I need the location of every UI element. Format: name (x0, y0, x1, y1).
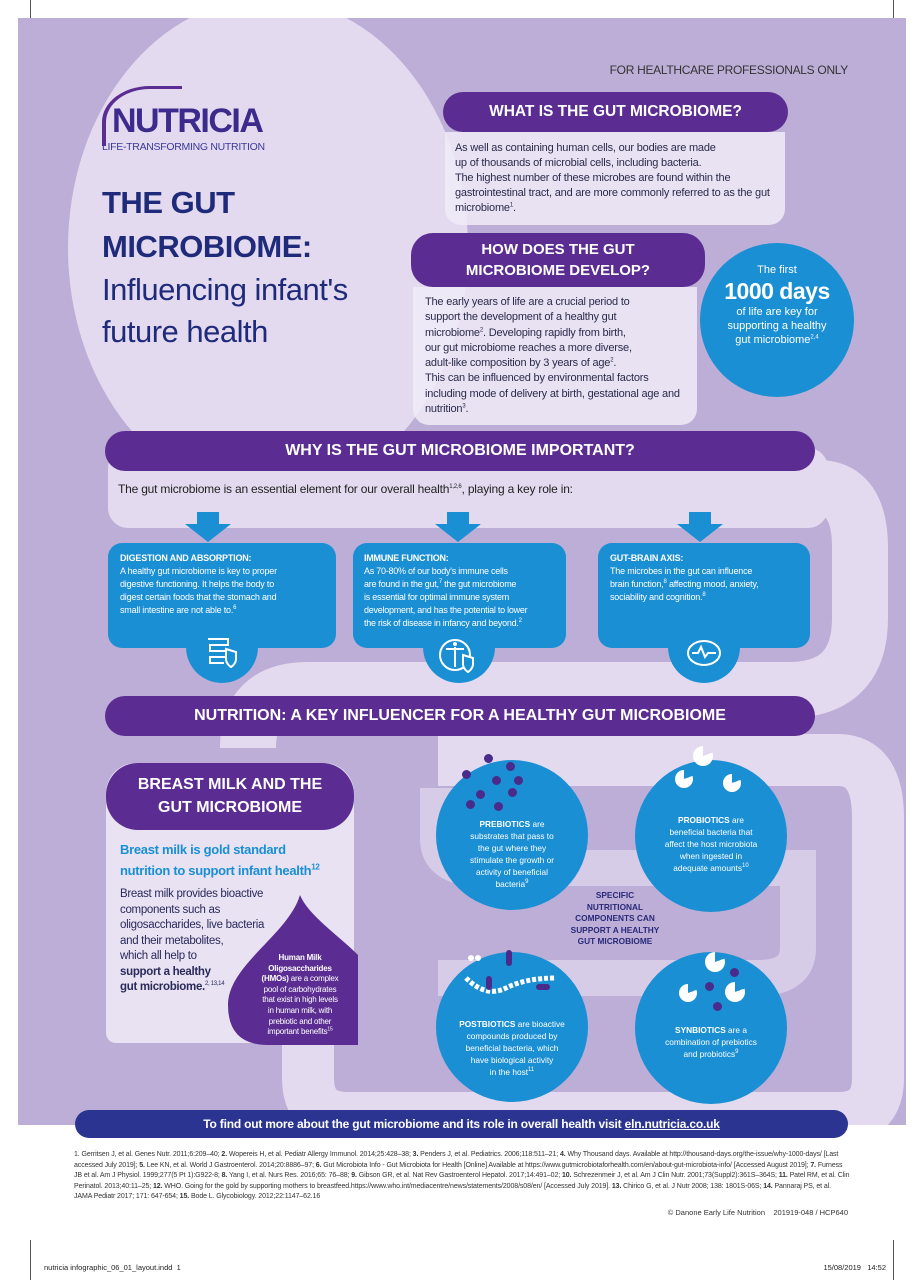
callout: HMO drop: important benefits15 (267, 1026, 333, 1036)
circle: prebiotics: the gut where they (478, 843, 546, 853)
circle: prebiotics: PREBIOTICS are (479, 819, 544, 829)
circle: probiotics (635, 760, 787, 912)
circle: prebiotics (436, 760, 588, 910)
heading: GUT MICROBIOME (158, 799, 302, 816)
panel: digestion (108, 543, 336, 683)
callout: HMO drop (228, 895, 358, 1045)
title: future health (102, 314, 268, 349)
text block: oligosaccharides, live bacteria (120, 919, 264, 931)
panel: digestion: small intestine are not able to.6 (120, 605, 236, 615)
circle: synbiotics (635, 952, 787, 1104)
panel: digestion: A healthy gut microbiome is key to proper (120, 566, 277, 576)
heading: MICROBIOME DEVELOP? (466, 262, 650, 279)
heading (411, 233, 705, 287)
text block: intro: The gut microbiome is an essential element for our overall health1,2,6, playing a key role in: (118, 482, 573, 496)
crop marks (30, 0, 31, 18)
circle: prebiotics: activity of beneficial (476, 867, 548, 877)
subheading: Breast milk is gold standard (120, 842, 286, 857)
callout: HMO drop: prebiotic and other (269, 1017, 331, 1026)
circle: synbiotics: and probiotics9 (683, 1049, 738, 1059)
callout: 1000 days: of life are key for (736, 306, 818, 318)
circle: postbiotics: have biological activity (471, 1055, 553, 1065)
callout: 1000 days: gut microbiome2,4 (735, 334, 819, 346)
text block: and their metabolites, (120, 934, 223, 946)
panel: digestion: DIGESTION AND ABSORPTION: (120, 553, 251, 563)
circle: synbiotics: combination of prebiotics (665, 1037, 757, 1047)
panel: immune: IMMUNE FUNCTION: (364, 553, 448, 563)
subheading: nutrition to support infant health12 (120, 863, 320, 878)
icon: intestine (208, 638, 237, 668)
callout: 1000 days: The first (757, 264, 797, 276)
text: 15/08/2019 14:52 (823, 1263, 886, 1272)
footer bar (75, 1110, 848, 1138)
callout: 1000 days: 1000 days (724, 278, 830, 304)
callout: HMO drop: that exist in high levels (262, 995, 338, 1004)
references: 1. Gerritsen J, et al. Genes Nutr. 2011;6:209–40; 2. Wopereis H, et al. Pediatr Allergy Immunol. 2014;25:428–38; 3. Penders J, et al. Pediatrics. 2006;118:511–21; 4. Why Thousand days. Available at http://thousand-days.org/the-issue/why-1000-days/ [Last accessed July 2019]; 5. Lee KN, et al. World J Gastroenterol. 2014;20:8886–97; 6. Gut Microbiota Info - Gut Microbiota for Health [Online] Available at https://www.gutmicrobiotaforhealth.com/en/about-gut-microbiota-info/ [Accessed August 2019]; 7. Furness JB et al. Am J Physiol. 1999;277(5 Pt 1):G922-8; 8. Yang I, et al. Nurs Res. 2016;65: 76–88; 9. Gibson GR, et al. Nat Rev Gastroenterol Hepatol. 2017;14:491–02; 10. Schrezenmeir J, et al. Am J Clin Nutr. 2001;73(Suppl2):361S–364S; 11. Patel RM, et al. Clin Perinatol. 2013;40:11–25; 12. WHO. Going for the gold by supporting mothers to breastfeed.https://www.who.int/mediacentre/news/statements/2008/s08/en/ [Accessed July 2019]. 13. Chirico G, et al. J Nutr 2008; 138: 1801S-06S; 14. Pannaraj PS, et al. JAMA Pediatr 2017; 171: 647-654; 15. Bode L. Glycobiology. 2012;22:1147–62.16 (74, 1151, 849, 1200)
disclaimer: FOR HEALTHCARE PROFESSIONALS ONLY (610, 63, 848, 77)
text block: centre: SPECIFIC NUTRITIONAL COMPONENTS CAN SUPPORT A HEALTHY GUT MICROBIOME (571, 890, 659, 946)
callout: HMO drop: Human Milk (279, 953, 321, 962)
text block: The early years of life are a crucial period to (425, 296, 630, 308)
callout: HMO drop: Oligosaccharides (268, 964, 332, 973)
heading: nutrition (105, 696, 815, 736)
icon: brain (687, 640, 721, 666)
title: Influencing infant's (102, 272, 348, 307)
title: MICROBIOME: (102, 229, 312, 264)
circle: prebiotics: bacteria9 (496, 879, 528, 889)
panel: what is (443, 92, 788, 225)
text block: our gut microbiome reaches a more diverse, (425, 342, 632, 354)
circle: probiotics: adequate amounts10 (673, 863, 749, 873)
callout: 1000 days: supporting a healthy (727, 320, 827, 332)
circle: prebiotics: stimulate the growth or (470, 855, 554, 865)
text block: components such as (120, 904, 220, 916)
circle: postbiotics: in the host11 (490, 1067, 534, 1077)
text block: which all help to (120, 950, 197, 962)
text block (413, 287, 697, 425)
circle: prebiotics: substrates that pass to (470, 831, 554, 841)
icon: person shield (439, 639, 474, 674)
panel: immune (353, 543, 566, 683)
panel: gut-brain: sociability and cognition.8 (610, 592, 706, 602)
text block: gut microbiome.2, 13,14 (120, 981, 224, 993)
heading: WHAT IS THE GUT MICROBIOME? (489, 103, 742, 120)
print slug: nutricia infographic_06_01_layout.indd 1 (44, 1263, 181, 1272)
text block: support a healthy (120, 966, 211, 978)
text block (445, 132, 785, 225)
panel: develop (411, 233, 705, 425)
heading (106, 763, 354, 830)
heading: why important (105, 431, 815, 471)
arrow 2 (435, 512, 481, 542)
panel: immune: are found in the gut,7 the gut microbiome (364, 579, 516, 589)
circle: probiotics: beneficial bacteria that (669, 827, 753, 837)
text block: up of thousands of microbial cells, including bacteria. (455, 157, 701, 169)
logo: NUTRICIA (112, 102, 262, 140)
text block: microbiome2. Developing rapidly from birth, (425, 327, 626, 339)
panel: gut-brain (598, 543, 810, 683)
circle: synbiotics: SYNBIOTICS are a (675, 1025, 747, 1035)
text block (120, 888, 264, 993)
panel: immune: development, and has the potential to lower (364, 605, 527, 615)
heading: why important: WHY IS THE GUT MICROBIOME IMPORTANT? (285, 442, 635, 459)
circle: probiotics: when ingested in (680, 851, 742, 861)
panel: digestion: digest certain foods that the stomach and (120, 592, 276, 602)
arrow 3 (677, 512, 723, 542)
panel: gut-brain: GUT-BRAIN AXIS: (610, 553, 683, 563)
logo: LIFE-TRANSFORMING NUTRITION (102, 141, 265, 153)
heading: BREAST MILK AND THE (138, 776, 322, 793)
panel: digestion: digestive functioning. It helps the body to (120, 579, 274, 589)
circle: postbiotics (436, 952, 588, 1102)
callout: HMO drop: (HMOs) are a complex (262, 974, 338, 983)
circle: postbiotics: compounds produced by (467, 1031, 557, 1041)
text block: This can be influenced by environmental factors including mode of delivery at birth, gestational age and nutrition3. (425, 372, 680, 415)
title: THE GUT (102, 185, 235, 220)
callout: HMO drop: pool of carbohydrates (264, 985, 336, 994)
callout: HMO drop: in human milk, with (268, 1006, 332, 1015)
heading: HOW DOES THE GUT (481, 241, 635, 258)
heading (443, 92, 788, 132)
circle: probiotics: PROBIOTICS are (678, 815, 744, 825)
panel: immune: As 70-80% of our body's immune cells (364, 566, 508, 576)
title (102, 185, 348, 349)
text block: As well as containing human cells, our bodies are made (455, 142, 716, 154)
subheading (120, 842, 320, 878)
panel: breast milk (106, 763, 354, 1043)
panel: immune: is essential for optimal immune system (364, 592, 509, 602)
panel: immune: the risk of disease in infancy and beyond.2 (364, 618, 522, 628)
footer bar: To find out more about the gut microbiome and its role in overall health visit eln.nutricia.co.uk (203, 1117, 720, 1131)
callout: 1000 days (700, 243, 854, 397)
copyright: © Danone Early Life Nutrition 201919-048 / HCP640 (668, 1208, 848, 1217)
panel: gut-brain: The microbes in the gut can influence (610, 566, 752, 576)
text block: adult-like composition by 3 years of age2. (425, 357, 616, 369)
circle: postbiotics: beneficial bacteria, which (466, 1043, 558, 1053)
heading: nutrition: NUTRITION: A KEY INFLUENCER FOR A HEALTHY GUT MICROBIOME (194, 707, 726, 724)
text block: Breast milk provides bioactive (120, 888, 263, 900)
logo (102, 86, 265, 153)
arrow 1 (185, 512, 231, 542)
panel: gut-brain: brain function,8 affecting mood, anxiety, (610, 579, 758, 589)
text block: support the development of a healthy gut (425, 311, 616, 323)
circle: postbiotics: POSTBIOTICS are bioactive (459, 1019, 565, 1029)
text block: The highest number of these microbes are found within the gastrointestinal tract, and are more commonly referred to as the gut microbiome1. (455, 172, 770, 214)
circle: probiotics: affect the host microbiota (665, 839, 757, 849)
